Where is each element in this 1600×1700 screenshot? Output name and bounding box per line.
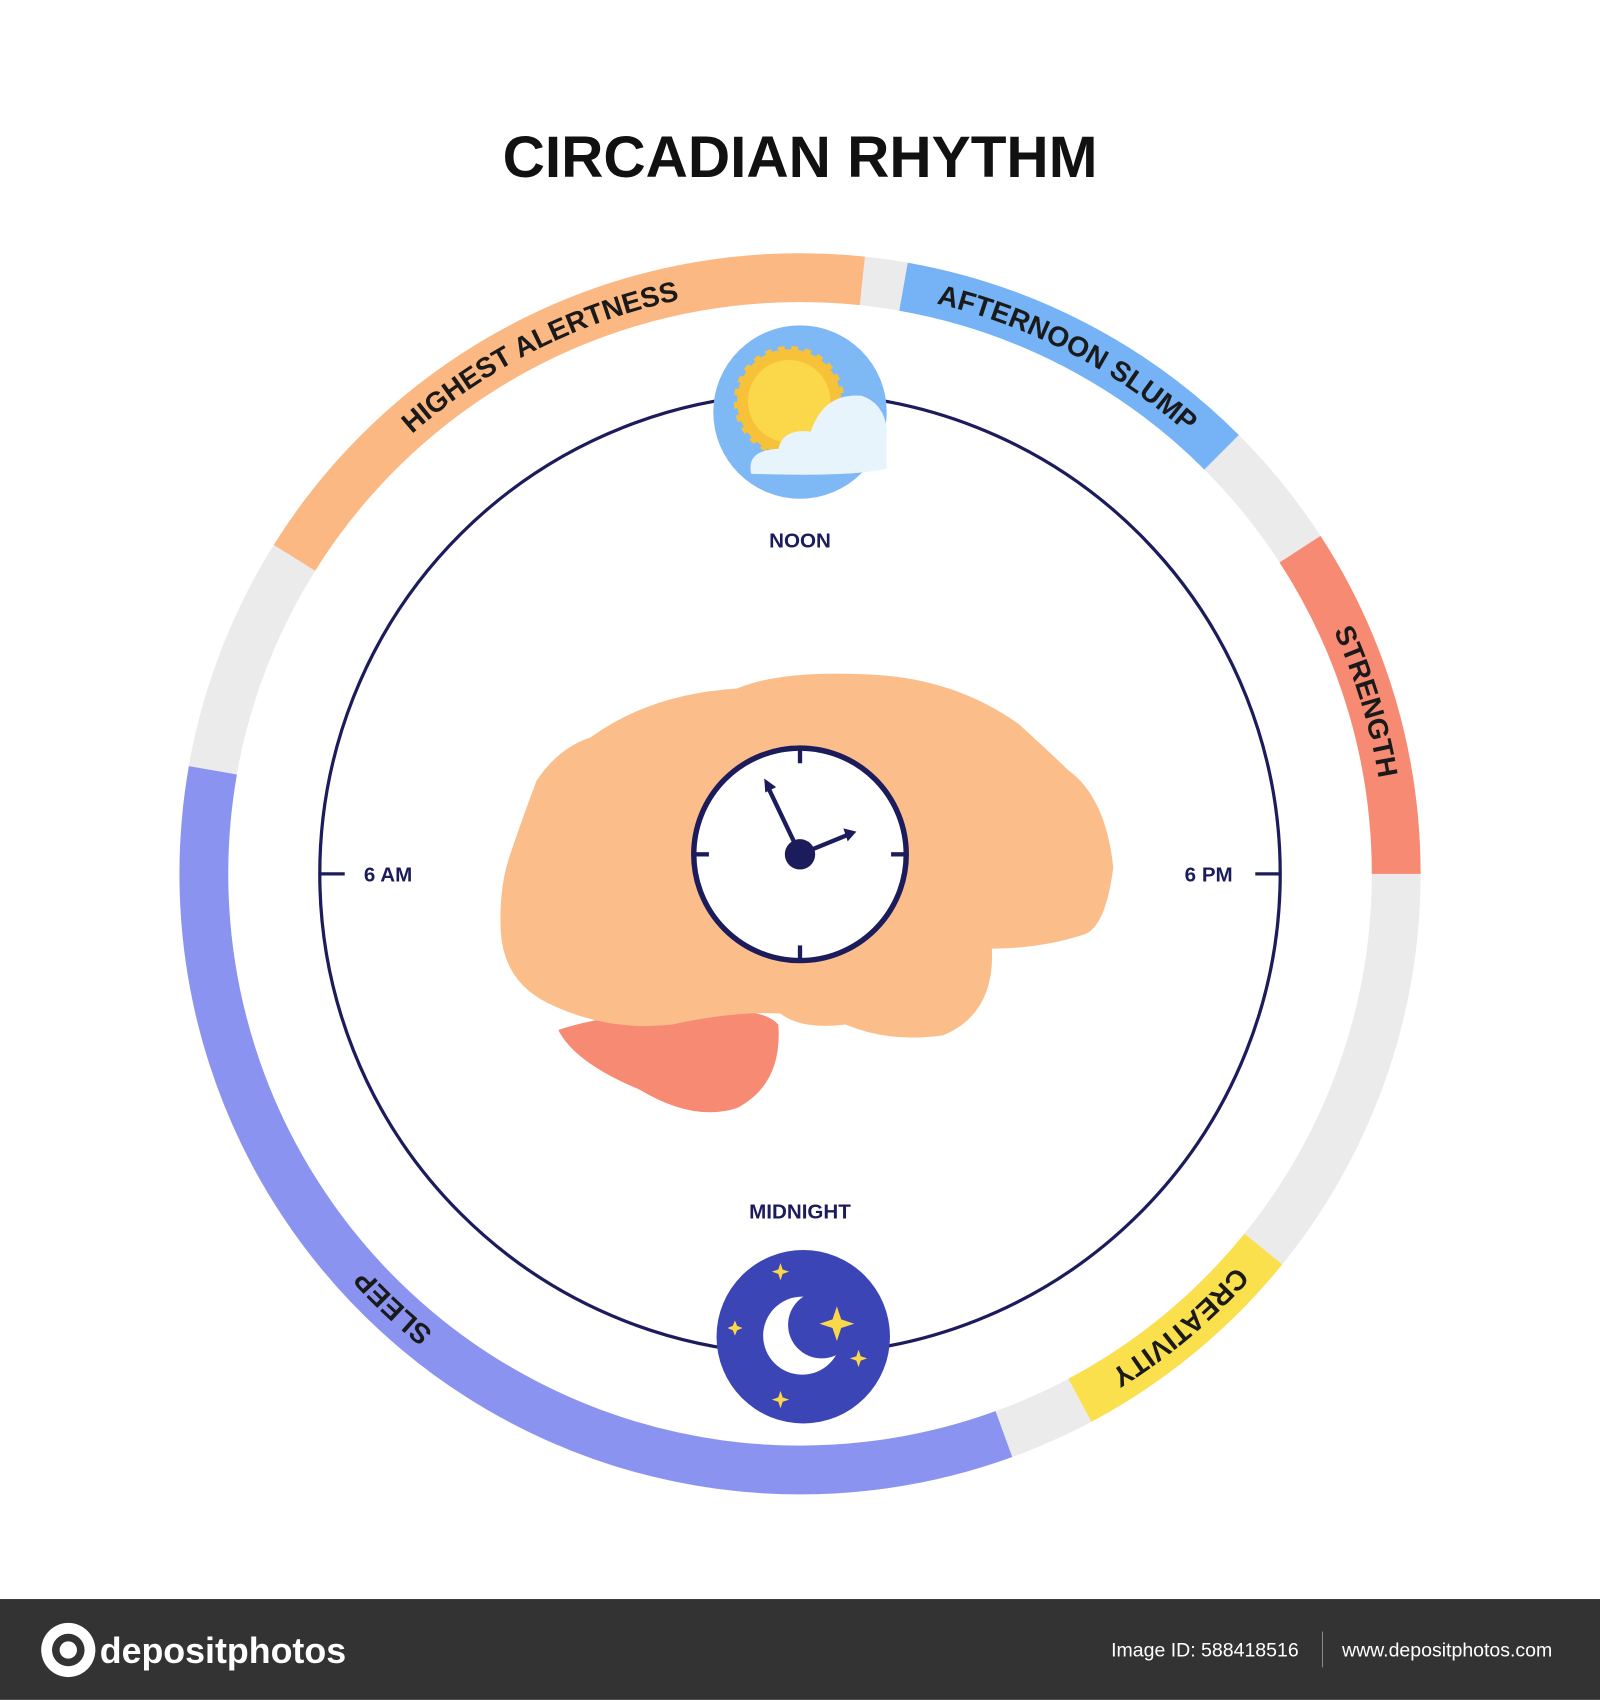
ring labels: AFTERNOON SLUMP	[937, 286, 1196, 425]
time labels: 6 AM	[364, 863, 412, 886]
title: CIRCADIAN RHYTHM	[503, 125, 1097, 190]
segment: sleep	[204, 770, 1004, 1470]
time labels: MIDNIGHT	[749, 1201, 851, 1224]
icon: clock	[694, 748, 906, 961]
segment: strength	[1300, 549, 1396, 874]
ring labels: HIGHEST ALERTNESS	[400, 282, 678, 433]
time labels: 6 PM	[1185, 863, 1233, 886]
segment: afternoon slump	[904, 287, 1222, 452]
footer bar: depositphotos	[100, 1631, 346, 1671]
ring labels: STRENGTH	[1336, 626, 1398, 777]
footer bar	[0, 1599, 1600, 1700]
segment: creativity	[1080, 1249, 1263, 1400]
footer bar: Image ID: 588418516	[1111, 1640, 1299, 1662]
segment: highest alertness	[294, 278, 862, 558]
time labels	[364, 530, 1233, 1224]
ring labels: CREATIVITY	[1116, 1270, 1246, 1388]
inner clock circle	[320, 394, 1280, 1354]
ring: segmented day cycle	[204, 278, 1396, 1470]
ring labels: SLEEP	[355, 1276, 430, 1344]
icon: moon	[717, 1250, 890, 1423]
icon: sun	[713, 325, 887, 499]
footer bar: www.depositphotos.com	[1341, 1640, 1552, 1662]
ring labels	[355, 282, 1398, 1388]
brain with clock	[500, 674, 1113, 1112]
time labels: NOON	[769, 530, 831, 553]
